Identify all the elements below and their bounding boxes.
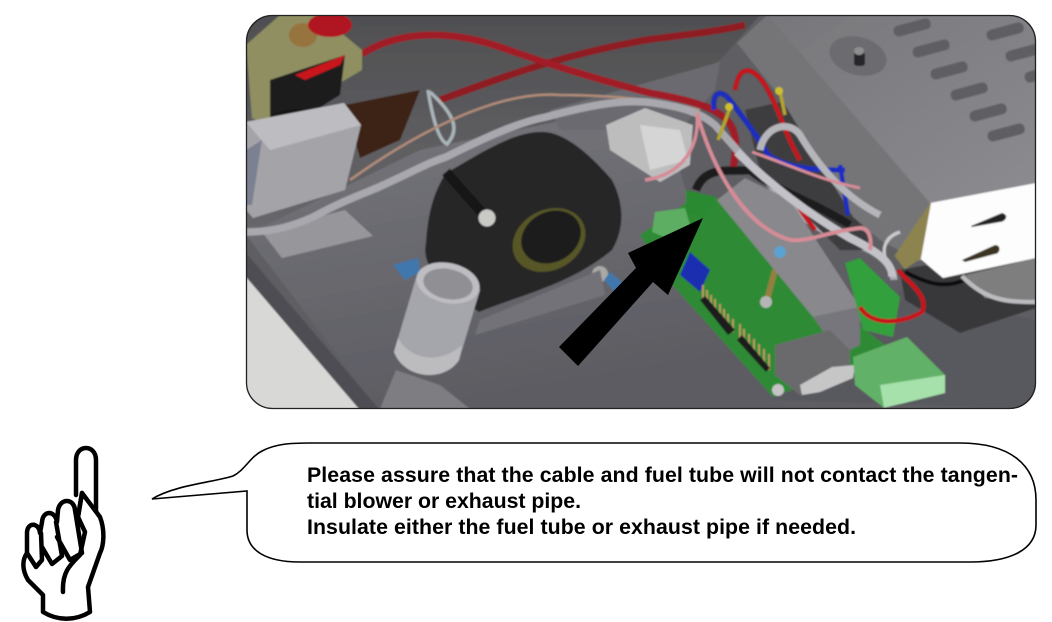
red wire loop: [735, 71, 924, 321]
red cable 1: [362, 35, 736, 170]
bracket clip: [895, 203, 930, 268]
box stud: [830, 36, 886, 76]
front white cable: [737, 152, 892, 277]
ethernet jack: [775, 330, 850, 395]
terminal block: [853, 337, 945, 408]
wedge shadow under blower: [475, 270, 605, 335]
white box front: [918, 183, 1036, 278]
exhaust pipe: [398, 278, 481, 358]
callout text: Please assure that the cable and fuel tube will not contact the tangen-: [307, 463, 1018, 487]
thin copper wire: [350, 95, 700, 180]
solenoid valve bracket: [246, 15, 362, 125]
grey valve block: [246, 103, 361, 218]
white connector: [606, 108, 693, 182]
callout text: [307, 463, 1018, 539]
pink wire: [697, 113, 871, 250]
solenoid fitting: [289, 23, 317, 47]
red cable 2: [440, 25, 745, 100]
metal box top: [767, 15, 1036, 203]
sheet metal bracket behind blower: [550, 62, 720, 122]
shadow patch near pipe: [380, 370, 470, 409]
cable tie: [428, 90, 454, 144]
yellow wire pins: [718, 92, 785, 140]
small green board: [845, 258, 900, 337]
callout bubble: [152, 443, 1036, 562]
white cable: [246, 102, 894, 280]
back wall: [246, 15, 760, 240]
blower: [425, 132, 621, 312]
blue patches: [393, 258, 420, 280]
brown tape: [345, 90, 420, 158]
white cable loop: [760, 127, 880, 215]
photo: electronics assembly with blower: [246, 13, 1052, 409]
blue trim pot: [680, 252, 710, 292]
floor: [250, 122, 687, 376]
blue wires: [714, 93, 845, 170]
green PCB: [640, 190, 885, 397]
blue bead: [774, 246, 786, 258]
standoff: [767, 270, 775, 300]
dark wire cavity: [745, 100, 875, 250]
white cable under box: [962, 276, 1036, 302]
white panel lower left: [246, 277, 359, 409]
pin headers: [703, 285, 769, 370]
callout text: tial blower or exhaust pipe.: [307, 489, 581, 513]
right floor: [770, 290, 1036, 409]
dark floor strip: [246, 253, 379, 409]
blower fan ring: [512, 208, 586, 272]
metal box flange: [737, 15, 932, 262]
arrow: [559, 218, 703, 366]
black cable: [905, 272, 965, 284]
metal shelf over PCB: [717, 178, 860, 317]
dark block under box: [900, 264, 1035, 334]
black wires: [696, 170, 850, 225]
photo border: [246, 16, 1036, 408]
small green connector: [652, 208, 690, 240]
bracket plate: [262, 210, 373, 258]
box slots: [893, 18, 1035, 142]
icon: pointing hand: [23, 448, 103, 619]
callout text: Insulate either the fuel tube or exhaust pipe if needed.: [307, 515, 856, 539]
